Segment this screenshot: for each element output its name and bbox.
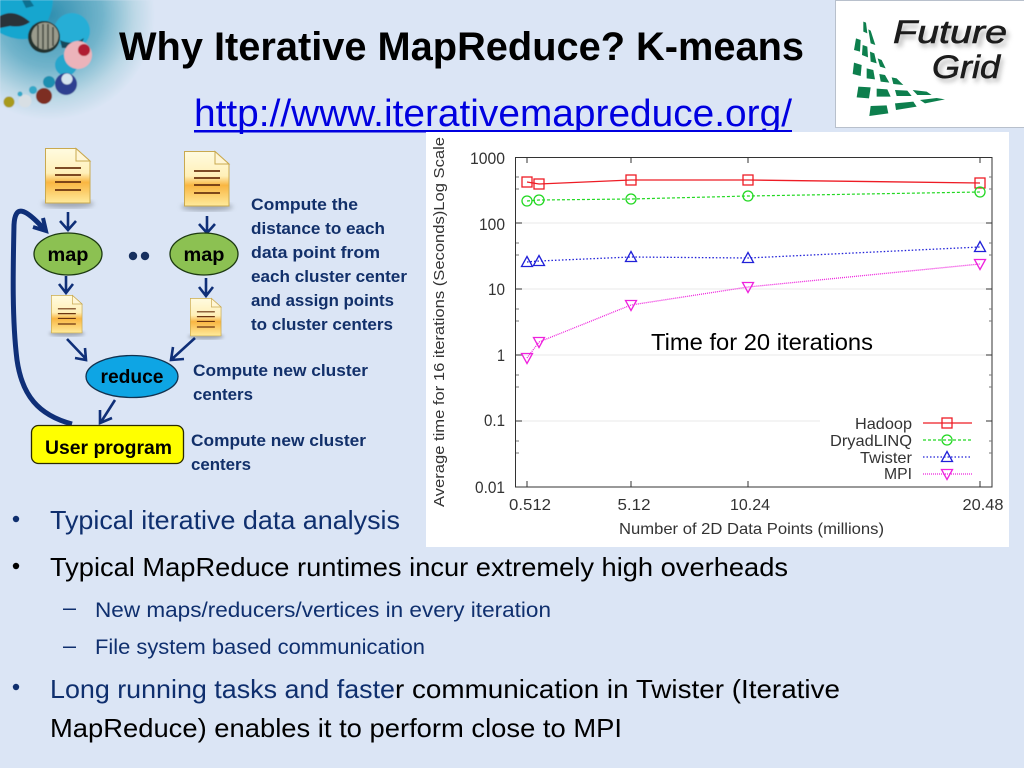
bullet 3 <box>13 674 840 743</box>
y axis tick labels: 1000 <box>470 149 505 168</box>
logo: FutureGrid: Grid <box>932 49 1001 85</box>
text: user program description: centers <box>191 456 251 474</box>
y axis tick labels: 10 <box>488 280 505 299</box>
bullet 3: MapReduce) enables it to perform close to MPI <box>50 713 622 743</box>
x axis tick labels: 20.48 <box>962 497 1004 514</box>
axes and ticks <box>516 157 992 487</box>
grid lines <box>516 223 992 421</box>
text: map description: distance to each <box>251 220 385 238</box>
legend <box>830 416 972 483</box>
corner image: globe and spheres <box>0 0 160 125</box>
user program box: User program <box>45 438 172 459</box>
map node left <box>34 233 102 275</box>
ellipsis dots <box>129 252 149 260</box>
icon: output document left <box>49 295 85 336</box>
x axis tick labels <box>509 497 1004 514</box>
logo: FutureGrid: Grid <box>935 53 1005 89</box>
bullet 1: Typical iterative data analysis <box>50 505 400 535</box>
icon: input document right <box>181 152 233 211</box>
arrows between nodes <box>59 212 215 423</box>
x axis tick labels: 5.12 <box>618 497 651 514</box>
text: reduce description: Compute new cluster <box>193 362 369 380</box>
map node right: map <box>184 245 224 266</box>
text: user program description: Compute new cluster <box>191 432 367 450</box>
bullet 3: Long running tasks and faste <box>50 674 395 704</box>
chart annotation: Time for 20 iterations <box>651 329 873 355</box>
legend: MPI <box>884 466 912 483</box>
text: map description: Compute the <box>251 196 358 214</box>
y axis tick labels: 0.1 <box>484 411 505 430</box>
map node right <box>170 233 238 275</box>
y axis tick labels: 1 <box>497 346 505 365</box>
text: map description: data point from <box>251 244 380 262</box>
bullet list <box>13 505 840 743</box>
text: map description: each cluster center <box>251 268 408 286</box>
x axis tick labels: 0.512 <box>509 497 551 514</box>
text: reduce description: centers <box>193 386 253 404</box>
logo: FutureGrid: Future <box>893 14 1007 50</box>
text: user program description <box>191 432 367 474</box>
logo: FutureGrid <box>836 0 1024 128</box>
legend: Twister <box>860 450 913 467</box>
icon: input document left <box>42 148 94 208</box>
arrow: feedback loop <box>13 211 72 424</box>
series: MPI <box>522 260 986 364</box>
series: DryadLINQ <box>522 187 985 206</box>
diagram: MapReduce flow <box>13 148 408 474</box>
x axis title: Number of 2D Data Points (millions) <box>619 521 884 538</box>
legend: DryadLINQ <box>830 433 912 450</box>
text: map description: to cluster centers <box>251 316 393 334</box>
link url: http://www.iterativemapreduce.org/ <box>194 93 792 135</box>
y axis tick labels: 100 <box>479 215 505 234</box>
logo: FutureGrid: Future <box>896 18 1010 54</box>
sub-bullet 1: New maps/reducers/vertices in every iteration <box>95 599 551 622</box>
sub-bullet 2: File system based communication <box>95 636 425 659</box>
text: reduce description <box>193 362 369 404</box>
icon: output document right <box>188 298 224 339</box>
text: map description: and assign points <box>251 292 394 310</box>
reduce node: reduce <box>100 367 164 388</box>
y axis tick labels <box>470 149 505 497</box>
reduce node <box>86 356 178 398</box>
line chart panel <box>426 132 1009 547</box>
text: map description <box>251 196 408 334</box>
user program box <box>32 426 184 464</box>
legend: Hadoop <box>855 416 912 433</box>
bullet 2: Typical MapReduce runtimes incur extremely high overheads <box>50 552 788 582</box>
x axis tick labels: 10.24 <box>730 497 770 514</box>
y axis tick labels: 0.01 <box>475 478 505 497</box>
map node left: map <box>48 245 88 266</box>
title: Why Iterative MapReduce? K-means <box>119 25 804 69</box>
bullet 3: r communication in Twister (Iterative <box>395 674 840 704</box>
series: Twister <box>522 242 986 266</box>
series: Hadoop <box>522 175 985 189</box>
y axis title: Average time for 16 iterations (Seconds)Log Scale <box>431 137 448 507</box>
